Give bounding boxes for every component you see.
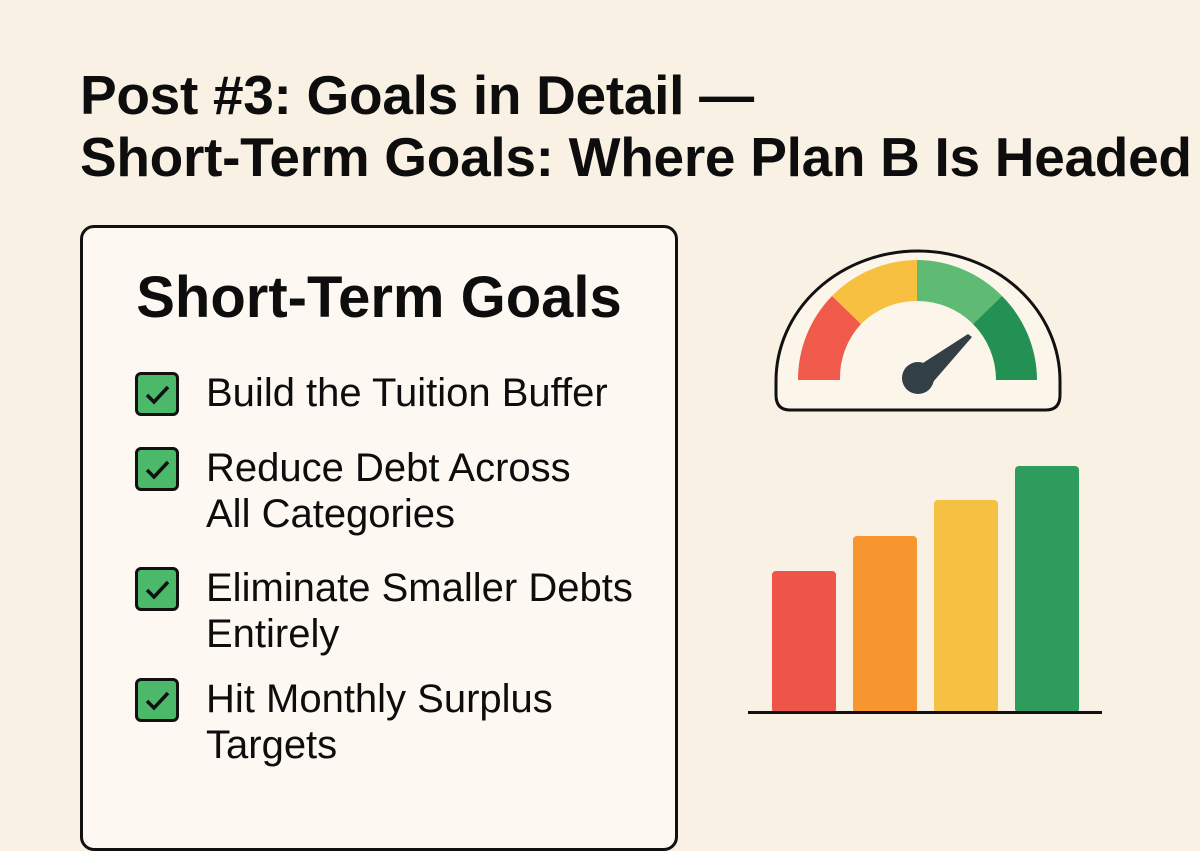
panel heading: Short-Term Goals: [136, 265, 622, 330]
item: monthly surplus: [135, 677, 553, 767]
item: tuition buffer: [135, 371, 608, 416]
panel: short-term goals: Eliminate Smaller Debts: [206, 566, 633, 610]
title: Short-Term Goals: Where Plan B Is Headed: [80, 126, 1192, 188]
bar chart: [748, 466, 1102, 714]
item: reduce debt: [135, 446, 571, 536]
item: eliminate smaller debts: [135, 566, 633, 656]
panel: short-term goals: Reduce Debt Across: [206, 446, 571, 490]
panel: short-term goals: Targets: [206, 723, 337, 767]
panel: short-term goals: All Categories: [206, 492, 455, 536]
title: Post #3: Goals in Detail —: [80, 64, 754, 126]
panel: short-term goals: Entirely: [206, 612, 339, 656]
panel: short-term goals: [80, 225, 678, 851]
panel: short-term goals: Build the Tuition Buffer: [206, 371, 608, 415]
title: [80, 64, 1192, 188]
panel: short-term goals: Hit Monthly Surplus: [206, 677, 553, 721]
